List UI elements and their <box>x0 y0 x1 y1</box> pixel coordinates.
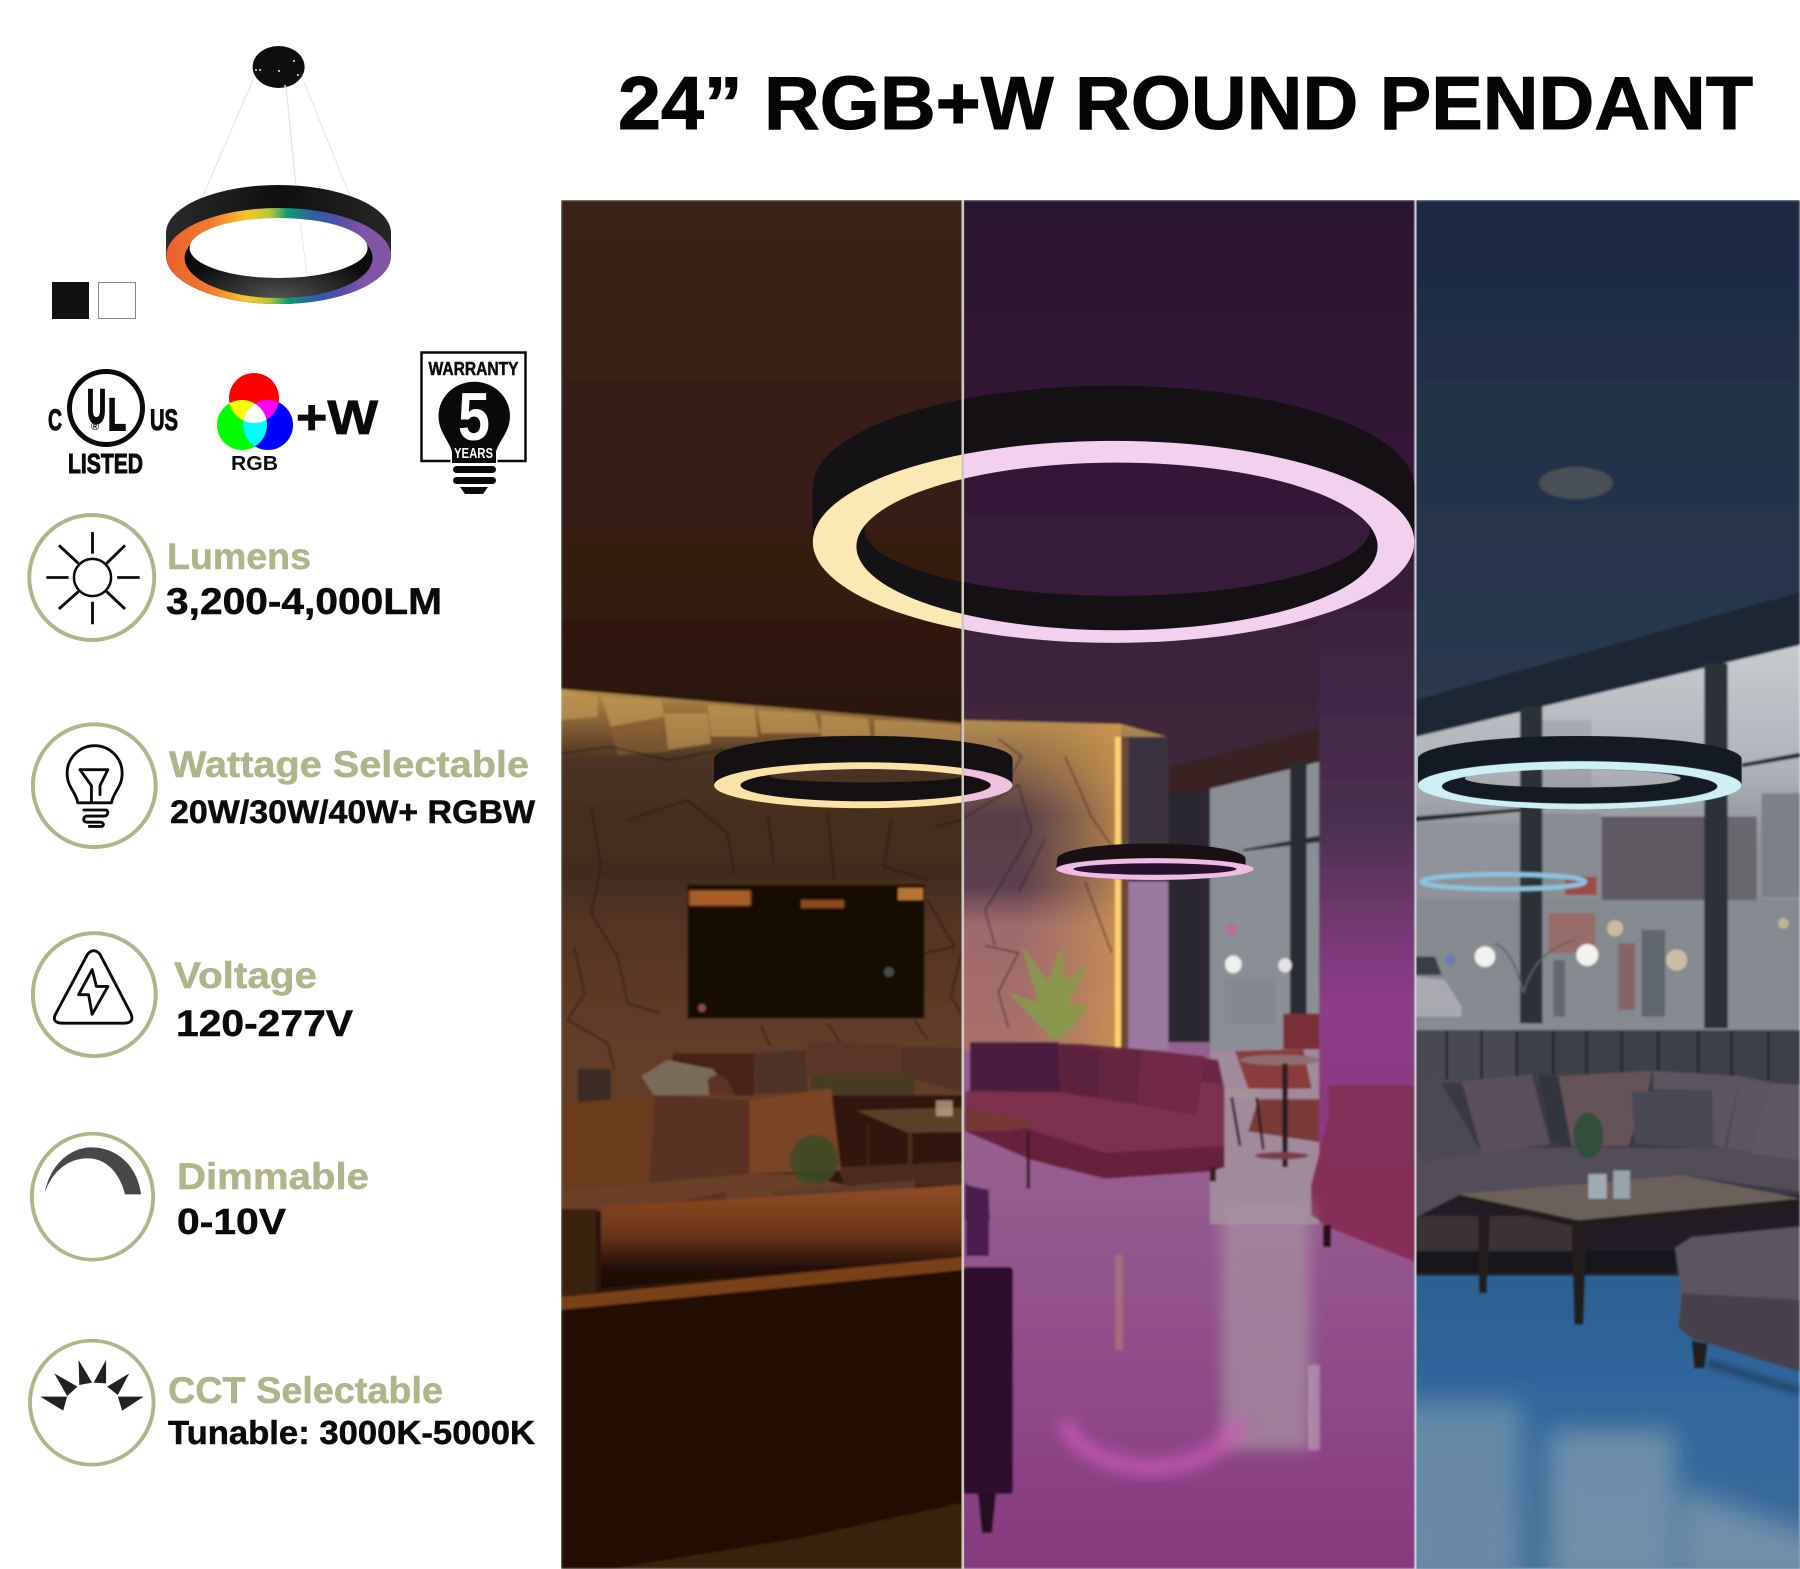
text: dimmable: Dimmable <box>177 1156 369 1197</box>
text: cct <box>168 1370 535 1451</box>
RGB+W mark: +W <box>296 392 379 445</box>
text: voltage <box>174 955 353 1044</box>
UL listed mark: ® <box>91 421 99 433</box>
product illustration: pendant <box>166 46 391 304</box>
photo: warm panel <box>561 200 962 1569</box>
icon: voltage triangle <box>33 933 156 1056</box>
text: dimmable: 0-10V <box>177 1201 286 1242</box>
colour swatch: black <box>52 282 89 319</box>
icon: CCT sunrise <box>30 1341 154 1465</box>
warranty badge <box>422 352 526 494</box>
warranty badge: WARRANTY <box>428 359 518 379</box>
UL listed mark: L <box>108 389 126 440</box>
text: lumens <box>166 536 442 622</box>
text: lumens: Lumens <box>167 536 311 577</box>
warranty badge: 5 <box>458 379 490 455</box>
text: voltage: Voltage <box>174 955 317 996</box>
text: wattage: Wattage Selectable <box>169 744 529 785</box>
RGB+W mark <box>217 373 379 475</box>
UL listed mark <box>48 372 178 479</box>
icon: dimmer arc <box>32 1134 153 1260</box>
icon: wattage bulb <box>33 724 156 847</box>
UL listed mark: US <box>150 404 178 437</box>
divider: warm / purple <box>962 200 964 1569</box>
UL listed mark: U <box>87 381 106 434</box>
divider: purple / blue <box>1414 200 1416 1569</box>
icon: lumens sun <box>29 515 154 640</box>
text: wattage <box>169 744 536 830</box>
wall-mounted television <box>688 885 924 1018</box>
text: cct: Tunable: 3000K-5000K <box>168 1414 535 1451</box>
text: wattage: 20W/30W/40W+ RGBW <box>170 794 536 830</box>
RGB+W mark: RGB <box>231 453 278 475</box>
photo: purple panel <box>964 200 1414 1569</box>
text: dimmable <box>177 1156 369 1242</box>
UL listed mark: C <box>48 404 62 437</box>
title: 24” RGB+W ROUND PENDANT <box>618 61 1753 145</box>
pendant rings: warm side <box>714 400 962 808</box>
UL listed mark: LISTED <box>68 448 143 479</box>
colour swatch: white <box>98 282 136 318</box>
pendant ring: blue side <box>1418 736 1742 809</box>
photo: blue panel <box>1395 200 1800 1569</box>
warranty badge: YEARS <box>454 445 493 462</box>
text: voltage: 120-277V <box>176 1003 353 1044</box>
pendant rings: purple side <box>964 386 1414 880</box>
text: cct: CCT Selectable <box>168 1370 443 1411</box>
text: lumens: 3,200-4,000LM <box>166 581 442 622</box>
